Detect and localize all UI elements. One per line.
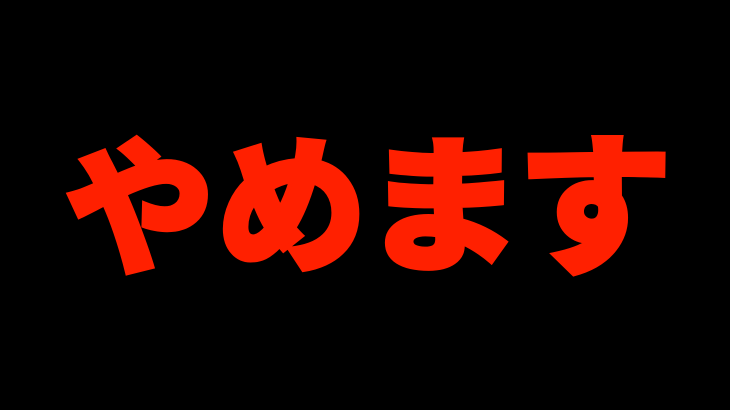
title: す: [517, 124, 673, 294]
title: め: [217, 125, 366, 292]
title: や: [65, 130, 214, 294]
title: ま: [362, 127, 524, 290]
